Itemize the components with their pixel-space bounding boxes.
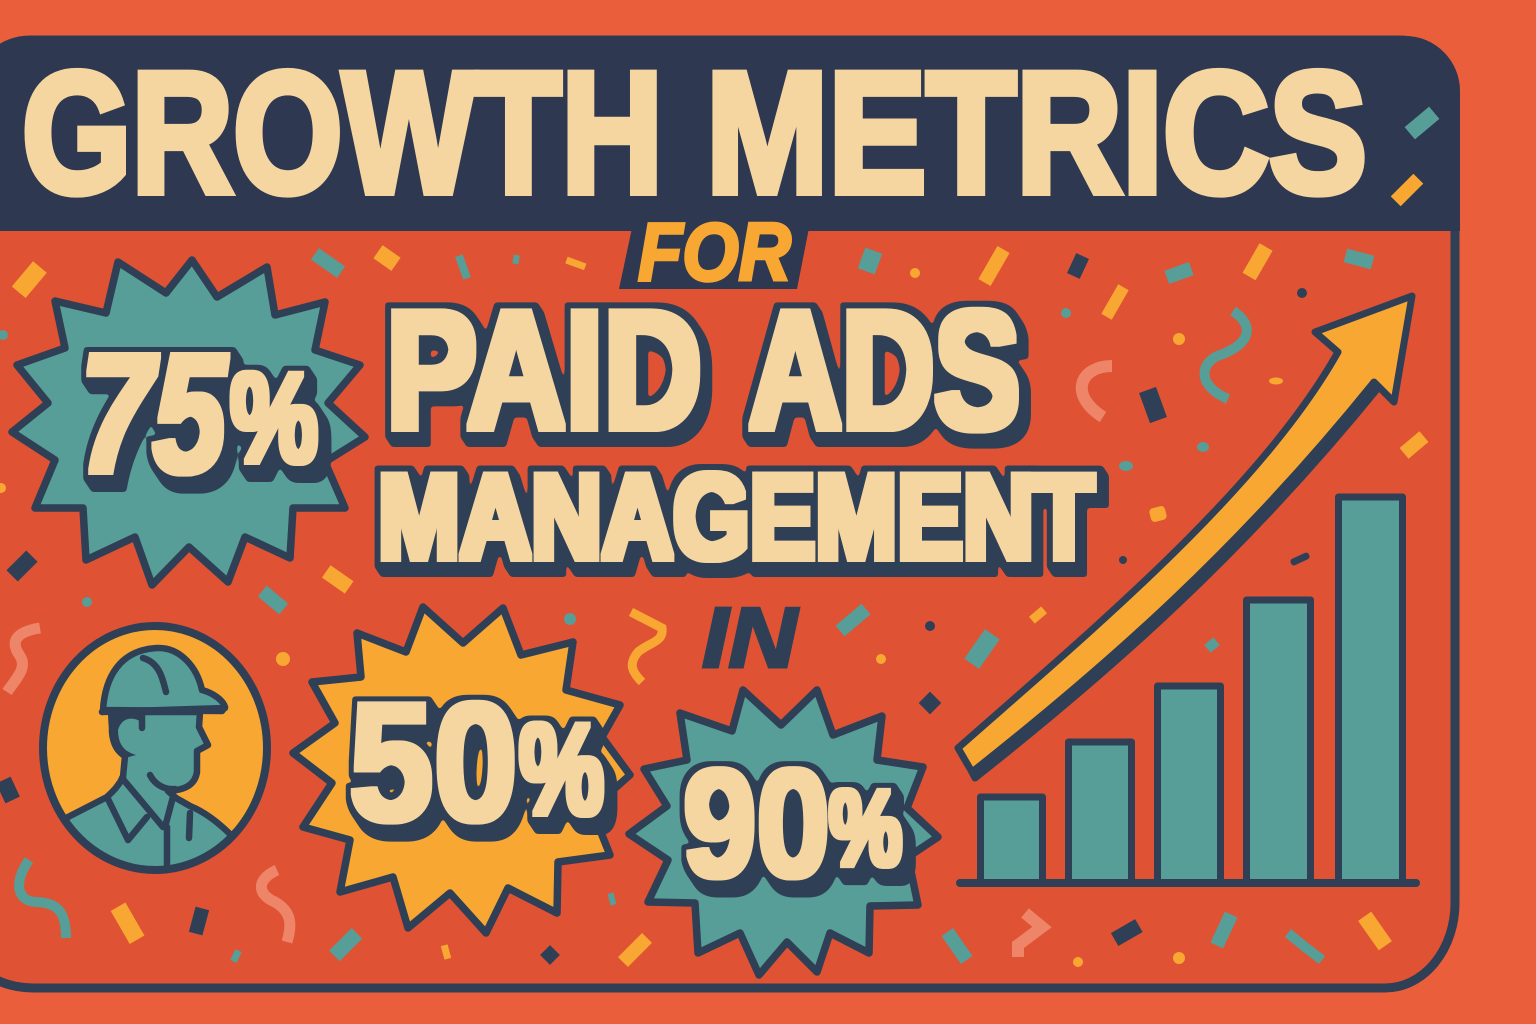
confetti scatter: [0, 243, 1428, 967]
heading: Paid Ads: [386, 276, 1020, 464]
burst: 75%: [12, 260, 365, 585]
heading: Paid Ads: ADS: [749, 276, 1020, 464]
burst: 90%: [629, 690, 938, 975]
heading: Paid Ads: PAID: [386, 276, 702, 464]
title: GROWTH: [22, 37, 663, 229]
FOR tab: FOR: [638, 207, 791, 298]
burst: 50%: 50: [349, 668, 518, 856]
portrait ring: [43, 626, 267, 870]
worker silhouette: [66, 714, 232, 866]
burst: 50%: [293, 607, 630, 933]
title: [22, 37, 1367, 229]
burst: 50%: %: [519, 696, 604, 842]
growth arrow: [958, 296, 1412, 778]
burst: 90%: %: [829, 767, 902, 888]
burst: 90%: 90: [683, 738, 830, 909]
header band: [0, 36, 1460, 231]
header confetti: [1391, 107, 1439, 206]
burst: 75%: %: [230, 347, 318, 490]
icon: worker portrait: [40, 626, 267, 890]
label: IN: IN: [702, 591, 799, 686]
burst: 75%: 75: [80, 319, 228, 509]
title: METRICS: [706, 37, 1367, 229]
bar chart: [956, 497, 1420, 887]
heading: Management: MANAGEMENT: [378, 450, 1094, 584]
hard hat: [102, 648, 225, 712]
